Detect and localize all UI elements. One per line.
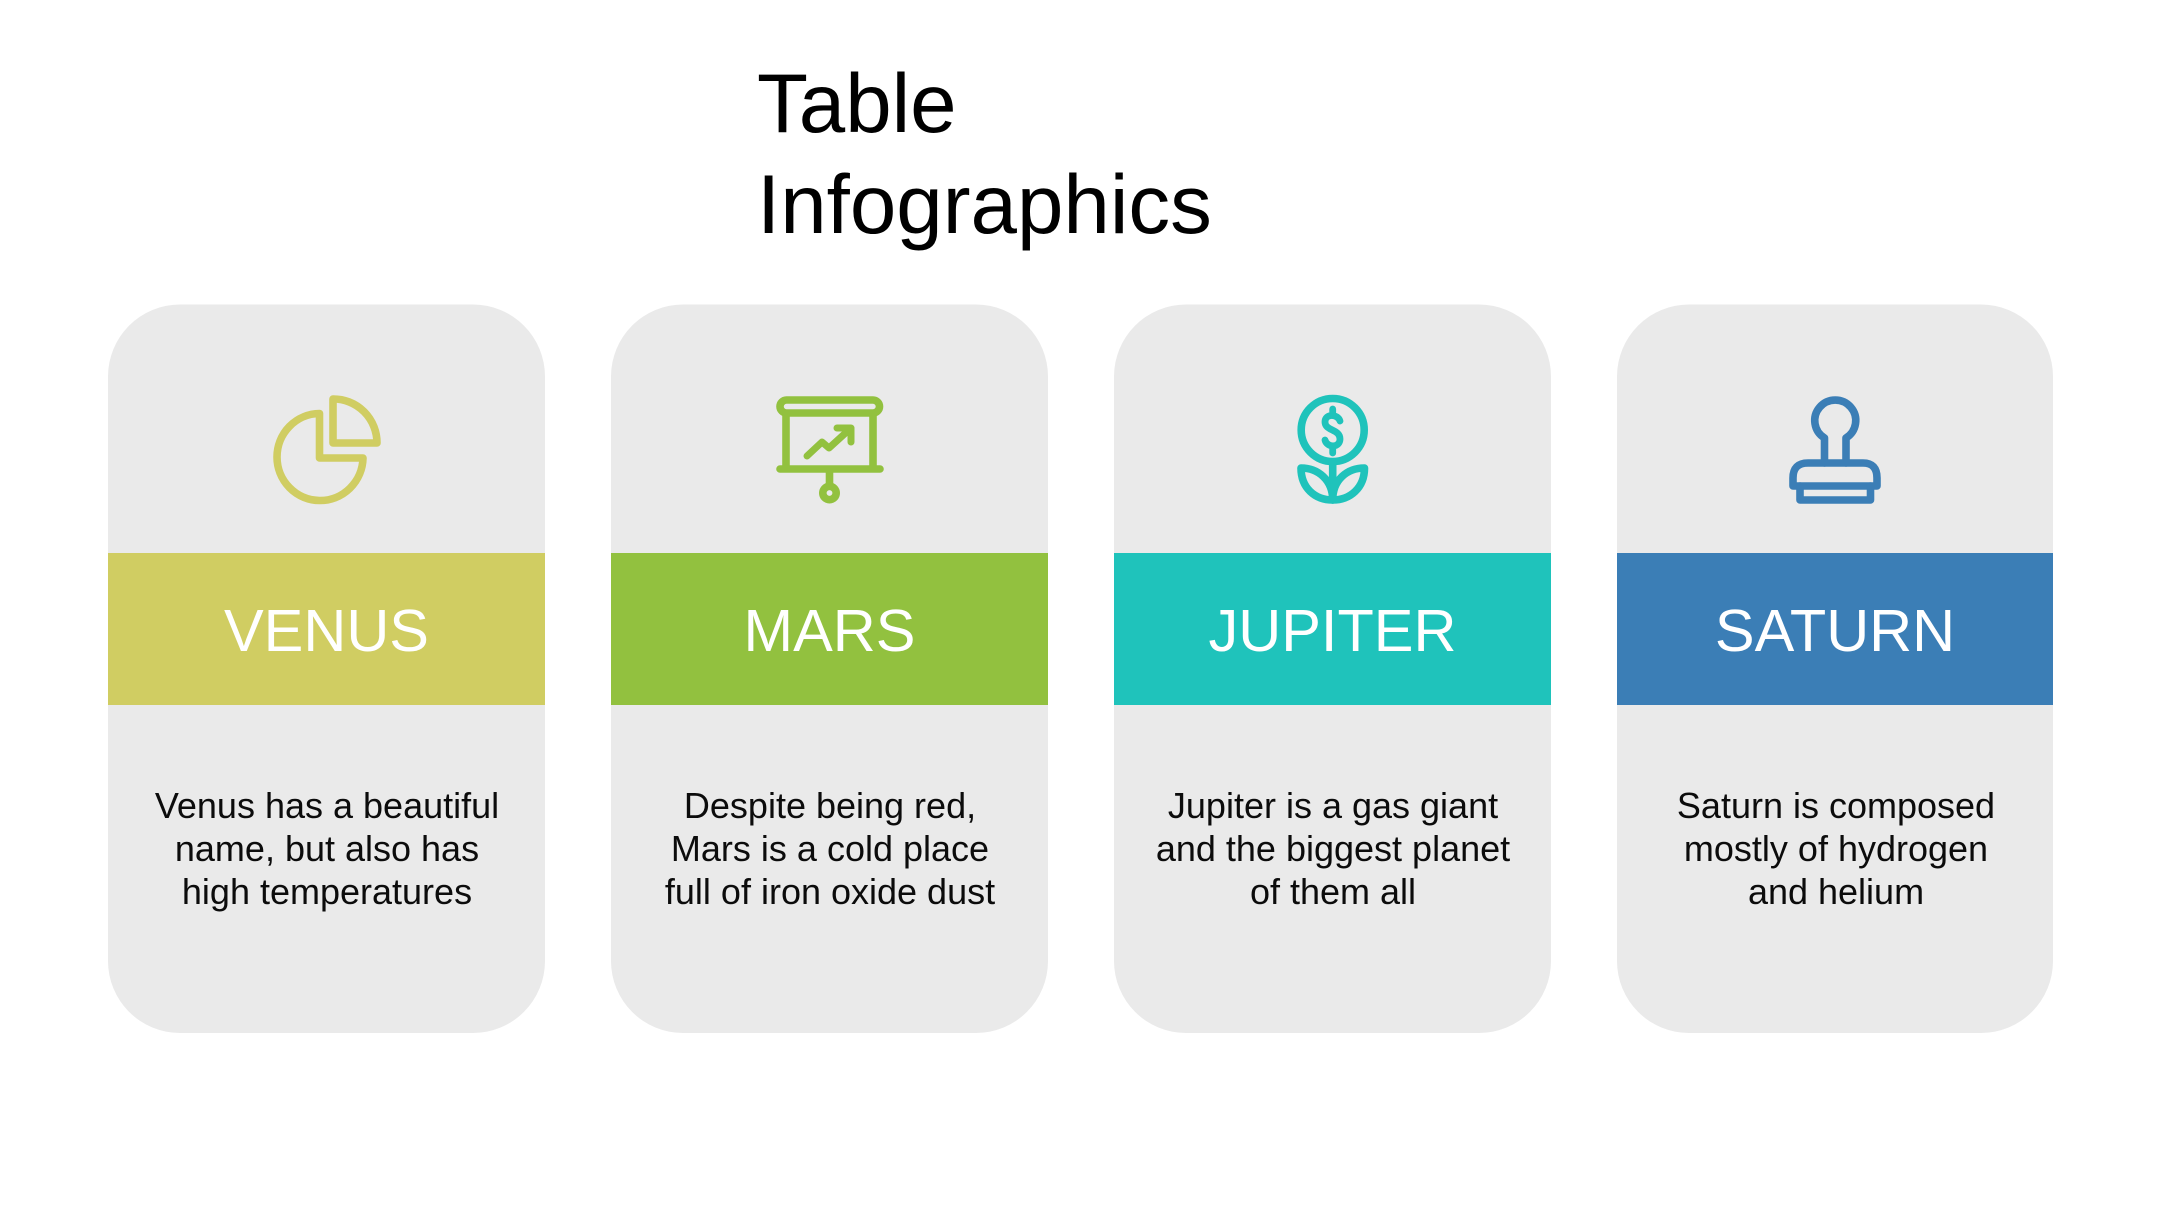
card background: Mars — [611, 304, 1048, 1033]
band: Venus — [108, 553, 545, 705]
text: Saturn description — [1677, 785, 1995, 912]
text: Jupiter description: and the biggest planet — [1156, 828, 1510, 869]
text: Saturn description: mostly of hydrogen — [1684, 828, 1988, 869]
text: Jupiter description — [1156, 785, 1510, 912]
heading: Mars: MARS — [744, 597, 915, 664]
icon: presentation board with rising arrow — [780, 400, 880, 500]
heading: Saturn: SATURN — [1715, 597, 1955, 664]
panel: Jupiter — [1114, 304, 1551, 1033]
text: Mars description: Despite being red, — [684, 785, 976, 826]
icon: rubber stamp — [1793, 400, 1877, 500]
text: Saturn description: and helium — [1748, 871, 1924, 912]
heading: Jupiter: JUPITER — [1209, 597, 1456, 664]
text: Jupiter description: of them all — [1250, 871, 1416, 912]
icon: money flower — [1301, 398, 1364, 500]
card background: Jupiter — [1114, 304, 1551, 1033]
icon: pie chart — [277, 399, 377, 500]
panel: Saturn — [1617, 304, 2053, 1033]
band: Mars — [611, 553, 1048, 705]
panel: Mars — [611, 304, 1048, 1033]
text: Mars description — [665, 785, 995, 912]
band: Saturn — [1617, 553, 2053, 705]
title: Table — [757, 56, 957, 150]
panel: Venus — [108, 304, 545, 1033]
card background: Saturn — [1617, 304, 2053, 1033]
heading: Venus: VENUS — [224, 597, 429, 664]
text: Mars description: Mars is a cold place — [671, 828, 989, 869]
title — [757, 56, 1212, 251]
text: Jupiter description: Jupiter is a gas giant — [1168, 785, 1498, 826]
band: Jupiter — [1114, 553, 1551, 705]
text: Venus description: Venus has a beautiful — [155, 785, 499, 826]
text: Venus description: high temperatures — [182, 871, 472, 912]
text: Venus description — [155, 785, 499, 912]
title: Infographics — [757, 157, 1212, 251]
text: Mars description: full of iron oxide dust — [665, 871, 995, 912]
text: Venus description: name, but also has — [175, 828, 479, 869]
text: Saturn description: Saturn is composed — [1677, 785, 1995, 826]
card background: Venus — [108, 304, 545, 1033]
